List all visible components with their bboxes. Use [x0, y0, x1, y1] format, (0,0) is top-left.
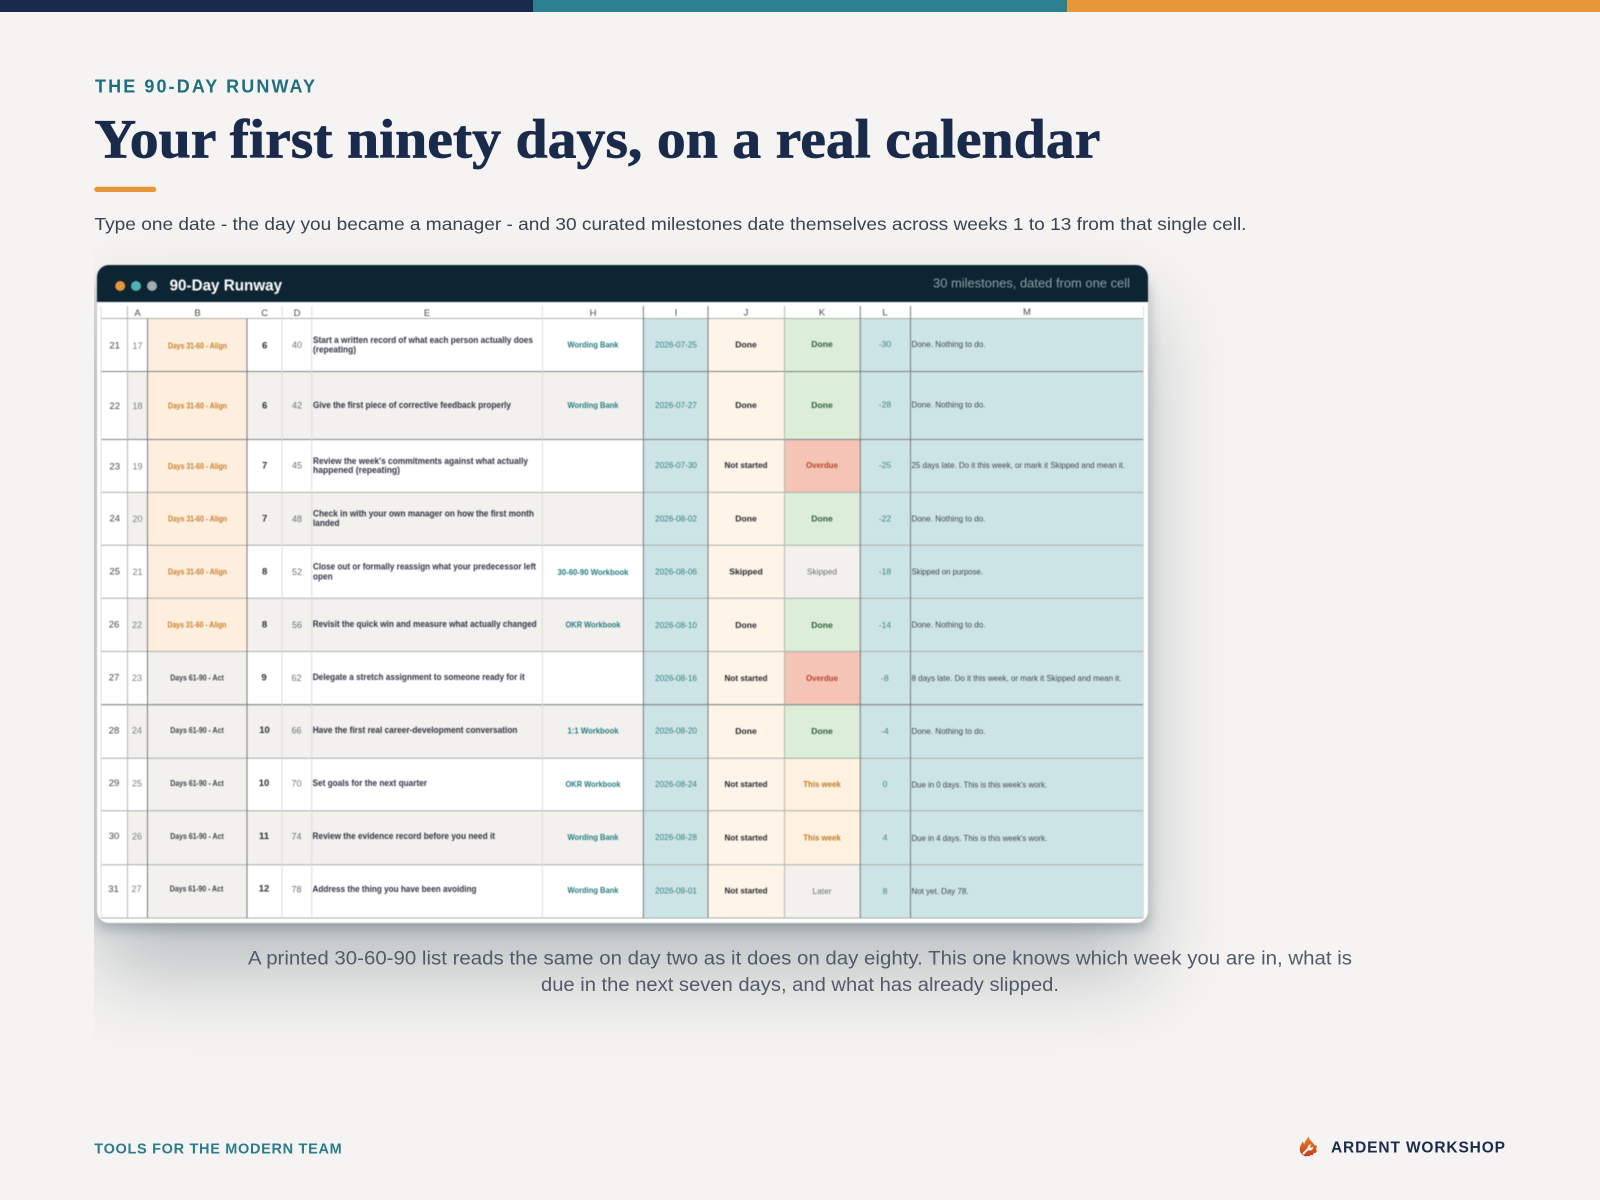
row 22: Days 31-60 - Align	[168, 402, 227, 410]
row 25: open	[313, 572, 333, 582]
row 30: Due in 4 days. This is this week's work.	[912, 833, 1047, 843]
row 27: Overdue	[806, 673, 838, 683]
window title bar: 30 milestones, dated from one cell	[933, 275, 1130, 290]
row 28: Days 61-90 - Act	[170, 726, 224, 735]
column header row: L	[882, 308, 888, 318]
row 25: 8	[262, 566, 267, 578]
column header row: A	[134, 308, 141, 319]
row 23	[109, 440, 1144, 492]
row 30: Wording Bank	[568, 832, 619, 842]
column header row: I	[675, 308, 677, 318]
column header row: D	[294, 308, 301, 319]
row 24	[109, 492, 1144, 545]
row 28: Done. Nothing to do.	[912, 726, 986, 736]
row 27	[109, 652, 1144, 705]
row 23: Not started	[724, 460, 768, 470]
row 29: Days 61-90 - Act	[170, 779, 224, 788]
row 26: Done. Nothing to do.	[912, 620, 986, 630]
row 27: 2026-08-16	[655, 673, 697, 683]
row 29: 0	[883, 779, 888, 789]
row 26: Revisit the quick win and measure what actually changed	[313, 619, 537, 630]
accent rule	[94, 187, 156, 192]
row 29: 29	[109, 778, 119, 789]
row 24: 2026-08-02	[655, 514, 697, 524]
column header row	[101, 306, 1144, 319]
row 25: -18	[879, 567, 891, 577]
row 26: 26	[109, 620, 119, 630]
row 29: 70	[291, 778, 302, 788]
row 27: -8	[881, 673, 889, 683]
row 31: Wording Bank	[568, 885, 619, 895]
row 28: 2026-08-20	[655, 726, 697, 736]
column header row: E	[424, 308, 430, 319]
row 29: 10	[259, 778, 269, 789]
row 25: Close out or formally reassign what your predecessor left	[313, 562, 537, 572]
row 23: 25 days late. Do it this week, or mark it Skipped and mean it.	[912, 460, 1125, 470]
row 22: 2026-07-27	[655, 400, 697, 410]
row 21: 6	[262, 340, 267, 352]
row 22: Done. Nothing to do.	[912, 400, 986, 410]
row 23: 45	[292, 460, 302, 470]
row 25: Skipped	[729, 567, 763, 577]
row 23: 7	[262, 460, 267, 472]
row 21: Done. Nothing to do.	[912, 339, 986, 349]
row 25: 25	[109, 566, 120, 578]
row 30: Review the evidence record before you need it	[312, 831, 496, 842]
row 24: landed	[313, 518, 340, 529]
row 23: Review the week's commitments against what actually	[313, 456, 529, 467]
row 26: 56	[292, 620, 302, 630]
row 22: 42	[292, 400, 302, 410]
row 26: OKR Workbook	[566, 620, 621, 630]
row 25: Skipped	[807, 567, 837, 577]
row 26	[109, 598, 1144, 652]
row 27: Not started	[724, 673, 768, 683]
column header row: M	[1023, 307, 1031, 318]
row 30: 2026-08-28	[655, 832, 697, 842]
row 24: Check in with your own manager on how the first month	[313, 508, 534, 520]
row 29: 2026-08-24	[655, 779, 697, 789]
column header row: J	[744, 308, 749, 318]
row 26: 22	[132, 620, 142, 630]
row 21: 17	[132, 341, 143, 351]
window title bar: 90-Day Runway	[170, 278, 282, 295]
row 24: 24	[109, 514, 120, 524]
row 31: Address the thing you have been avoiding	[312, 884, 477, 895]
row 23: Overdue	[806, 460, 838, 470]
row 24: -22	[879, 514, 891, 524]
row 30: 26	[132, 832, 142, 842]
row 24: Days 31-60 - Align	[168, 514, 227, 524]
row 21	[109, 318, 1144, 372]
row 26: -14	[879, 620, 891, 630]
column header row: C	[261, 308, 268, 319]
row 31: Not started	[724, 886, 768, 896]
row 31: 8	[883, 886, 888, 896]
row 26: Done	[735, 620, 757, 630]
row 22: 18	[132, 401, 143, 411]
row 29: Not started	[724, 779, 768, 789]
row 21: Days 31-60 - Align	[168, 342, 227, 350]
row 23: 19	[132, 462, 143, 472]
row 21: Done	[811, 339, 833, 349]
row 21: 40	[292, 340, 302, 350]
row 23: Days 31-60 - Align	[168, 462, 227, 471]
subtitle: Type one date - the day you became a manager - and 30 curated milestones date themselves across weeks 1 to 13 from that single cell.	[94, 214, 1246, 234]
row 30: This week	[803, 832, 841, 842]
window title bar	[97, 265, 1148, 302]
row 25: Days 31-60 - Align	[168, 568, 227, 576]
footer tagline: TOOLS FOR THE MODERN TEAM	[94, 1141, 342, 1157]
title: Your first ninety days, on a real calendar	[94, 109, 1100, 170]
row 30: 4	[883, 832, 888, 842]
row 25: Skipped on purpose.	[912, 567, 983, 577]
row 27: 27	[109, 672, 119, 684]
row 25: 30-60-90 Workbook	[558, 567, 629, 577]
row 22: Done	[811, 400, 833, 410]
top colour bar	[0, 0, 1600, 12]
row 26: Days 31-60 - Align	[168, 620, 227, 630]
row 31: 2026-09-01	[655, 886, 697, 896]
row 25	[109, 545, 1144, 598]
row 28: 66	[291, 726, 302, 736]
row 21: Done	[735, 339, 757, 349]
row 21: -30	[879, 339, 891, 349]
caption	[248, 948, 1352, 996]
card shadow	[97, 282, 1148, 974]
column header row: H	[590, 308, 597, 319]
row 22: Give the first piece of corrective feedback properly	[313, 400, 512, 411]
row 29: This week	[803, 779, 841, 789]
row 27: 9	[261, 672, 267, 684]
row 28: Done	[735, 726, 757, 736]
row 22: -28	[879, 400, 891, 410]
row 21: 2026-07-25	[655, 340, 697, 350]
row 22: Wording Bank	[568, 400, 619, 410]
row 26: Done	[811, 620, 833, 630]
row 21: 21	[109, 340, 120, 352]
row 31: Later	[812, 886, 832, 896]
row 29: OKR Workbook	[566, 779, 621, 789]
row 27: 62	[291, 673, 302, 683]
row 26: 8	[262, 620, 267, 630]
row 31: 27	[131, 884, 142, 894]
row 23: 2026-07-30	[655, 460, 697, 470]
row 28	[109, 705, 1144, 758]
row 22: 6	[262, 400, 267, 412]
row 30	[109, 811, 1144, 865]
row 31: 12	[259, 884, 269, 894]
row 26: 2026-08-10	[655, 620, 697, 630]
row 30: Days 61-90 - Act	[170, 832, 224, 841]
row 27: 23	[132, 673, 142, 683]
row 24: Done	[735, 514, 757, 524]
row 29	[109, 758, 1144, 811]
row 27: Days 61-90 - Act	[170, 674, 224, 682]
row 30: 74	[291, 832, 302, 842]
eyebrow: THE 90-DAY RUNWAY	[95, 77, 315, 97]
row 25: 52	[292, 567, 302, 577]
row 22: Done	[735, 400, 757, 410]
row 28: 10	[259, 725, 270, 736]
row 29: 25	[132, 778, 142, 788]
row 24: Done	[811, 514, 833, 524]
row 31: Not yet. Day 78.	[912, 886, 968, 896]
row 24: 7	[262, 514, 267, 524]
row 23: -25	[879, 460, 891, 470]
row 21: Wording Bank	[568, 340, 619, 350]
row 31: 78	[291, 884, 302, 894]
row 27: Delegate a stretch assignment to someone ready for it	[313, 672, 525, 683]
row 30: 30	[109, 831, 119, 842]
spreadsheet screenshot card	[97, 265, 1148, 923]
row 31: 31	[108, 884, 119, 895]
row 27: 8 days late. Do it this week, or mark it Skipped and mean it.	[912, 673, 1122, 683]
row 31	[108, 865, 1144, 918]
column header row: B	[194, 308, 201, 319]
row 22	[109, 372, 1144, 440]
row 29: Due in 0 days. This is this week's work.	[912, 780, 1047, 790]
row 28: -4	[881, 726, 889, 736]
row 28: 24	[132, 726, 142, 736]
column header row: K	[819, 308, 826, 318]
row 24: 48	[292, 514, 302, 524]
icon: flame with wrench	[1300, 1135, 1317, 1156]
caption: due in the next seven days, and what has already slipped.	[541, 975, 1059, 996]
row 25: 2026-08-06	[655, 567, 697, 577]
row 24: Done. Nothing to do.	[912, 514, 986, 524]
row 28: Have the first real career-development conversation	[313, 725, 518, 736]
row 21: Start a written record of what each person actually does	[313, 335, 533, 346]
row 22: 22	[109, 401, 120, 412]
row 23: 23	[109, 462, 120, 472]
row 25: 21	[132, 567, 143, 577]
row 28: 1:1 Workbook	[568, 726, 619, 736]
row 29: Set goals for the next quarter	[312, 778, 427, 789]
brand name: ARDENT WORKSHOP	[1331, 1140, 1505, 1157]
row 31: Days 61-90 - Act	[170, 884, 224, 894]
row 30: 11	[259, 831, 270, 842]
row 28: Done	[811, 726, 833, 736]
caption: A printed 30-60-90 list reads the same on day two as it does on day eighty. This one knows which week you are in, what is	[248, 948, 1352, 969]
row 23: happened (repeating)	[313, 465, 400, 476]
row 28: 28	[109, 726, 119, 736]
row 21: (repeating)	[313, 344, 356, 356]
row 24: 20	[132, 514, 143, 524]
row 30: Not started	[724, 832, 768, 842]
